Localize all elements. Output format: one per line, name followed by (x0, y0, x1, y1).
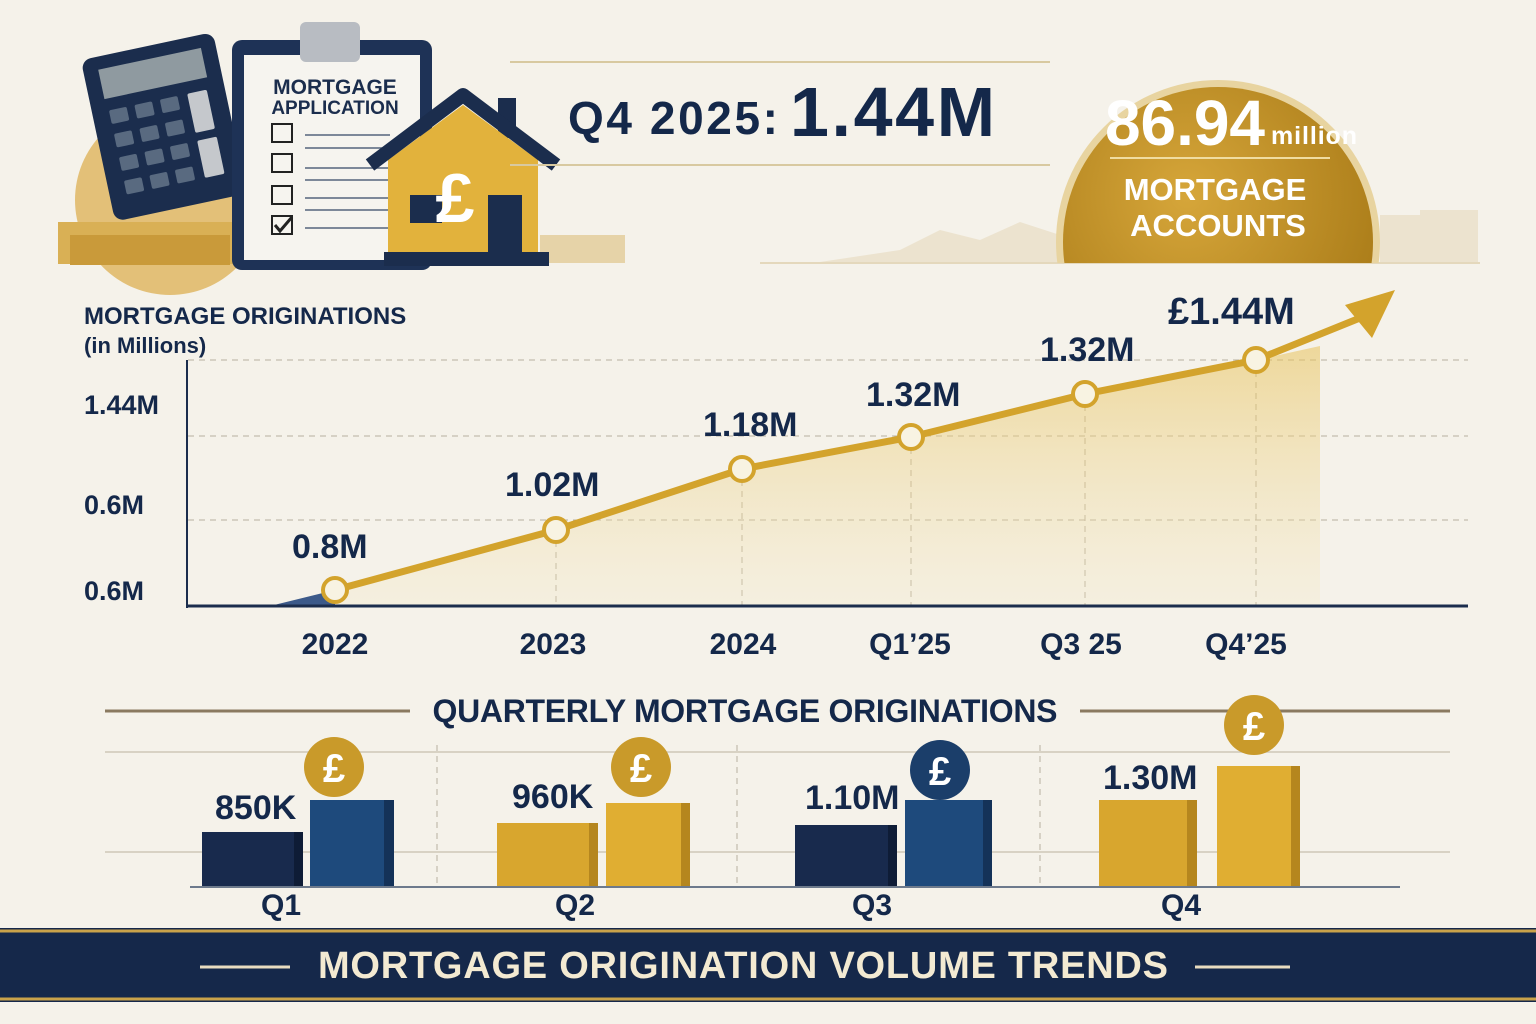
heading: quarterly mortgage originations: QUARTERLY MORTGAGE ORIGINATIONS (432, 693, 1058, 729)
chart: mortgage originations line chart: 1.32M (1040, 331, 1134, 369)
bar chart: quarterly (105, 695, 1450, 922)
callout: 86.94 million accounts: million (1271, 122, 1357, 150)
bars Q1 (202, 800, 394, 886)
icon: folders (58, 222, 248, 265)
bar chart: quarterly: Q3 (852, 889, 892, 922)
callout: 86.94 million accounts (1056, 80, 1380, 263)
bar chart: quarterly: Q4 (1161, 889, 1201, 922)
callout: 86.94 million accounts: MORTGAGE (1124, 172, 1306, 207)
headline: Q4 2025 (510, 62, 1050, 165)
coins: £ (323, 747, 345, 791)
bar chart: quarterly: Q1 (261, 889, 301, 922)
icon: house with pound: £ (436, 159, 475, 237)
chart: mortgage originations line chart: (in Millions) (84, 333, 206, 358)
chart: mortgage originations line chart (84, 290, 1468, 661)
chart: mortgage originations line chart: 0.6M (84, 490, 144, 520)
chart: mortgage originations line chart: MORTGAGE ORIGINATIONS (84, 303, 406, 330)
callout: 86.94 million accounts: 86.94 (1105, 87, 1265, 159)
icon: calculator (81, 32, 247, 222)
coins: £ (630, 747, 652, 791)
bars Q2 (497, 803, 690, 886)
bar chart: quarterly: 850K (215, 789, 297, 827)
coins: £ (929, 750, 951, 794)
chart: mortgage originations line chart: 0.6M (84, 576, 144, 606)
chart: mortgage originations line chart: £1.44M (1168, 291, 1295, 333)
bars Q3 (795, 800, 992, 886)
banner: footer title: MORTGAGE ORIGINATION VOLUME TRENDS (318, 945, 1168, 987)
icon: house with pound (370, 95, 625, 266)
bar chart: quarterly: Q2 (555, 889, 595, 922)
callout: 86.94 million accounts: ACCOUNTS (1130, 208, 1306, 243)
icon: clipboard: APPLICATION (271, 98, 399, 119)
bar chart: quarterly: 960K (512, 778, 594, 816)
chart: mortgage originations line chart: Q1’25 (869, 628, 951, 661)
coins: £ (1243, 705, 1265, 749)
banner: footer title (0, 928, 1536, 1002)
chart: mortgage originations line chart: 1.44M (84, 390, 159, 420)
chart: mortgage originations line chart: 2022 (302, 628, 368, 661)
icon: clipboard: MORTGAGE (273, 76, 397, 99)
bar chart: quarterly: 1.10M (805, 779, 900, 817)
illustration: calculator, clipboard, house (58, 22, 625, 295)
chart: mortgage originations line chart: 0.8M (292, 528, 368, 566)
chart: mortgage originations line chart: Q3 25 (1040, 628, 1122, 661)
chart: mortgage originations line chart: 1.32M (866, 376, 960, 414)
chart: mortgage originations line chart: Q4’25 (1205, 628, 1287, 661)
coins (304, 695, 1284, 800)
bar chart: quarterly: 1.30M (1103, 759, 1198, 797)
chart: mortgage originations line chart: 1.18M (703, 406, 798, 444)
bars Q4 (1099, 766, 1300, 886)
chart: mortgage originations line chart: 2023 (520, 628, 586, 661)
arrow (1345, 290, 1395, 338)
headline: Q4 2025: 1.44M (790, 73, 995, 151)
headline: Q4 2025: Q4 2025: (568, 92, 778, 144)
chart: mortgage originations line chart: 2024 (710, 628, 777, 661)
icon: clipboard (232, 22, 432, 270)
chart: mortgage originations line chart: 1.02M (505, 466, 600, 504)
skyline (820, 210, 1478, 262)
